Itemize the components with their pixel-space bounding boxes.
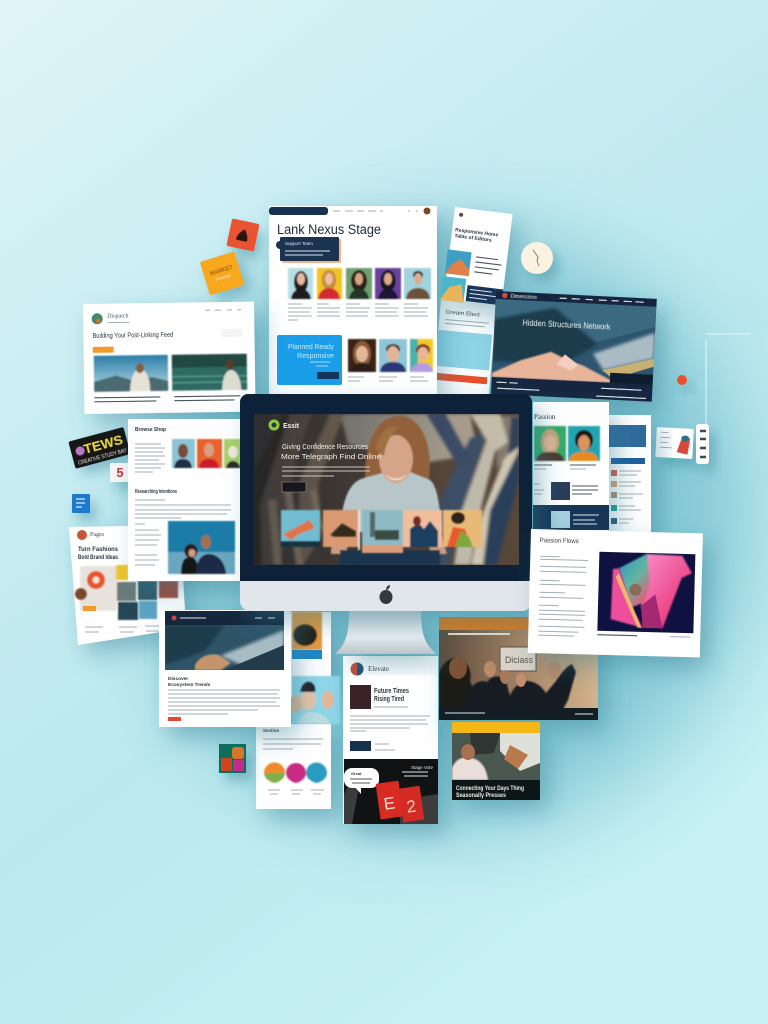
apple logo bbox=[380, 585, 392, 604]
heading: Dream Elect bbox=[446, 309, 480, 318]
red book 2: 2 bbox=[405, 797, 417, 817]
nav links bbox=[107, 310, 241, 323]
section heading: Researching Intentions bbox=[135, 489, 177, 495]
red button bbox=[430, 372, 487, 384]
icon: number five tile: 5 bbox=[116, 465, 124, 480]
intro text bbox=[135, 444, 165, 472]
panel: profiles article bbox=[128, 419, 241, 581]
chin bbox=[240, 581, 532, 611]
hero heading: Hidden Structures Network bbox=[522, 318, 612, 332]
heading: Turn Fashions bbox=[78, 547, 119, 553]
screen headline bbox=[281, 442, 381, 461]
screen brand: Essit bbox=[283, 423, 300, 430]
black banner bbox=[344, 759, 438, 824]
text block bbox=[538, 556, 588, 636]
artwork caption bbox=[597, 635, 637, 636]
captions bbox=[94, 396, 240, 402]
dark callout: Support Team bbox=[285, 241, 313, 246]
heading: Building Your Post-Linking Feed bbox=[92, 332, 174, 340]
woman bbox=[331, 416, 447, 565]
panel: yellow header card bbox=[452, 722, 540, 800]
logo bbox=[350, 662, 364, 676]
photo footer bbox=[445, 713, 593, 714]
panel: mobile list card bbox=[440, 207, 513, 307]
team photo bbox=[439, 630, 598, 708]
heading: Future Times bbox=[374, 688, 409, 695]
small portrait bbox=[551, 482, 570, 500]
nav icon bbox=[502, 293, 508, 298]
screen headline: Giving Confidence Resources bbox=[282, 442, 368, 451]
text block bbox=[263, 739, 323, 749]
portraits bbox=[172, 439, 241, 468]
heading: Responsive Home bbox=[455, 227, 499, 238]
card title bbox=[456, 785, 524, 799]
nav links bbox=[560, 298, 644, 302]
team photo: Diciass bbox=[505, 655, 533, 665]
item heading bbox=[572, 486, 598, 494]
logo dot bbox=[459, 213, 463, 217]
speech bubble: Great bbox=[351, 771, 362, 776]
portrait row 2 bbox=[348, 339, 433, 372]
heading: Ecosystem Trends bbox=[168, 682, 211, 688]
text block bbox=[350, 707, 430, 731]
poster bbox=[75, 565, 178, 620]
abstract artwork bbox=[597, 552, 695, 633]
photo headline bbox=[448, 633, 510, 635]
heading: Passion bbox=[534, 413, 556, 421]
captions bbox=[534, 464, 596, 466]
orange tag bbox=[83, 606, 96, 611]
card title: Seasonally Presses bbox=[456, 792, 506, 799]
monitor bbox=[240, 394, 532, 611]
blue banner bbox=[609, 425, 646, 447]
card title: Connecting Your Days Thing bbox=[456, 785, 524, 792]
screen body text bbox=[282, 467, 370, 476]
hero image bbox=[492, 299, 656, 385]
nav pill bbox=[269, 207, 328, 215]
logo bbox=[92, 313, 103, 324]
button bbox=[221, 329, 242, 337]
red book 1: E bbox=[383, 793, 396, 814]
small app icon tile bbox=[219, 744, 246, 773]
cartoon image bbox=[290, 676, 340, 724]
captions bbox=[85, 626, 161, 632]
icon: cream clock bbox=[521, 242, 553, 274]
screen thumbnails bbox=[281, 510, 482, 553]
orange photo bbox=[292, 612, 322, 650]
books fan bbox=[254, 414, 519, 565]
footer text bbox=[496, 382, 646, 398]
panel: logos card bbox=[256, 724, 331, 809]
soft shadow behind collage bbox=[150, 230, 750, 830]
navy band bbox=[533, 505, 609, 530]
screen logo bbox=[268, 420, 280, 430]
panel: ship article bbox=[159, 610, 291, 727]
nav links bbox=[333, 210, 418, 212]
heading: Rising Tired bbox=[374, 696, 404, 703]
heading bbox=[374, 688, 409, 703]
panel: grid gallery bbox=[69, 525, 186, 645]
photo 1 bbox=[94, 355, 168, 392]
monitor stand bbox=[335, 611, 437, 654]
badge subtitle: CREATIVE STUDY BAY bbox=[78, 448, 128, 467]
heading bbox=[168, 676, 211, 688]
note text bbox=[469, 289, 498, 301]
header text bbox=[180, 617, 275, 619]
sub captions bbox=[534, 469, 586, 494]
heading bbox=[78, 547, 119, 561]
icon: number five tile bbox=[110, 463, 130, 482]
yellow bar bbox=[452, 722, 540, 733]
photo bbox=[452, 733, 540, 780]
connector line bbox=[706, 334, 750, 424]
panel: team page bbox=[269, 206, 437, 394]
blue bar bbox=[292, 650, 322, 659]
heading: Browse Shop bbox=[135, 427, 167, 433]
panel: orange header team photo bbox=[439, 617, 598, 720]
button bbox=[350, 741, 371, 751]
panel: abstract pink article bbox=[528, 529, 703, 657]
brand: Pages bbox=[90, 532, 105, 538]
heading: Discover bbox=[168, 676, 188, 682]
blue promo card: Responsive bbox=[297, 351, 334, 360]
navy note bbox=[466, 285, 503, 305]
side text bbox=[135, 524, 161, 565]
panel: dark hero with hand bbox=[491, 291, 657, 402]
orange tag bbox=[93, 347, 114, 353]
small profile card bbox=[655, 427, 694, 459]
heading: Passion Flows bbox=[540, 537, 579, 545]
heading bbox=[454, 227, 499, 244]
badge: tews bbox=[68, 427, 131, 469]
panel: news cards bbox=[83, 302, 256, 414]
banner lines bbox=[402, 772, 428, 776]
text block bbox=[474, 257, 502, 275]
screen photo bbox=[254, 414, 519, 565]
heading: Lank Nexus Stage bbox=[277, 222, 381, 237]
badge icon bbox=[75, 445, 86, 456]
header icon bbox=[172, 616, 176, 620]
side text bbox=[375, 744, 395, 750]
dark callout bbox=[276, 237, 341, 263]
list text bbox=[619, 471, 643, 523]
icon: red dot bbox=[677, 375, 687, 385]
shell logos bbox=[264, 762, 327, 783]
blue button bbox=[611, 458, 645, 464]
banner text: Stage Vote bbox=[411, 765, 434, 770]
panel: dream card with form bbox=[429, 299, 497, 400]
hero image bbox=[165, 625, 284, 670]
thumb bbox=[350, 685, 371, 709]
section text bbox=[135, 500, 231, 518]
bezel bbox=[240, 394, 532, 582]
photo 2 bbox=[172, 354, 247, 391]
light blue form bbox=[435, 330, 492, 370]
heading: Table of Editors bbox=[454, 233, 492, 244]
text block bbox=[445, 319, 489, 327]
portrait captions bbox=[288, 304, 428, 320]
logo captions bbox=[268, 790, 324, 794]
icon toolbar bbox=[696, 424, 709, 464]
tag bbox=[168, 717, 181, 721]
orange bar bbox=[439, 617, 598, 630]
heading: Section bbox=[263, 728, 280, 733]
icon: orange tile: MARKET bbox=[209, 265, 234, 277]
portrait row bbox=[288, 268, 431, 299]
icon: blue doc bbox=[72, 494, 90, 513]
icon: orange tile bbox=[200, 251, 244, 295]
screen button bbox=[282, 482, 306, 492]
heading: Bold Brand Ideas bbox=[78, 555, 119, 561]
dark overlay bbox=[254, 414, 454, 565]
panel: passion profiles bbox=[533, 402, 609, 532]
panel: sidebar list bbox=[608, 415, 651, 532]
icon: orange tile: Finance bbox=[215, 272, 232, 282]
list icons bbox=[611, 470, 617, 524]
body text bbox=[168, 690, 280, 714]
logo bbox=[77, 530, 87, 540]
blue promo card: Planned Ready bbox=[288, 342, 334, 351]
panel: orange article column bbox=[291, 612, 331, 697]
screen headline: More Telegraph Find Online bbox=[281, 452, 381, 461]
blue promo card bbox=[277, 335, 342, 385]
brand: Dispatch bbox=[107, 313, 129, 320]
brand: Elevate bbox=[368, 665, 389, 673]
artwork meta bbox=[670, 636, 690, 638]
panel: center article bbox=[343, 656, 438, 824]
icon: red cube bbox=[226, 218, 260, 252]
thumbnails bbox=[440, 249, 472, 303]
nav avatar bbox=[424, 208, 430, 214]
badge title: TEWS bbox=[82, 432, 125, 457]
header bar bbox=[165, 611, 284, 625]
portraits bbox=[534, 426, 600, 461]
nav text: Dimensions bbox=[511, 294, 537, 301]
row 2 captions bbox=[348, 377, 428, 381]
couple photo bbox=[168, 521, 235, 574]
